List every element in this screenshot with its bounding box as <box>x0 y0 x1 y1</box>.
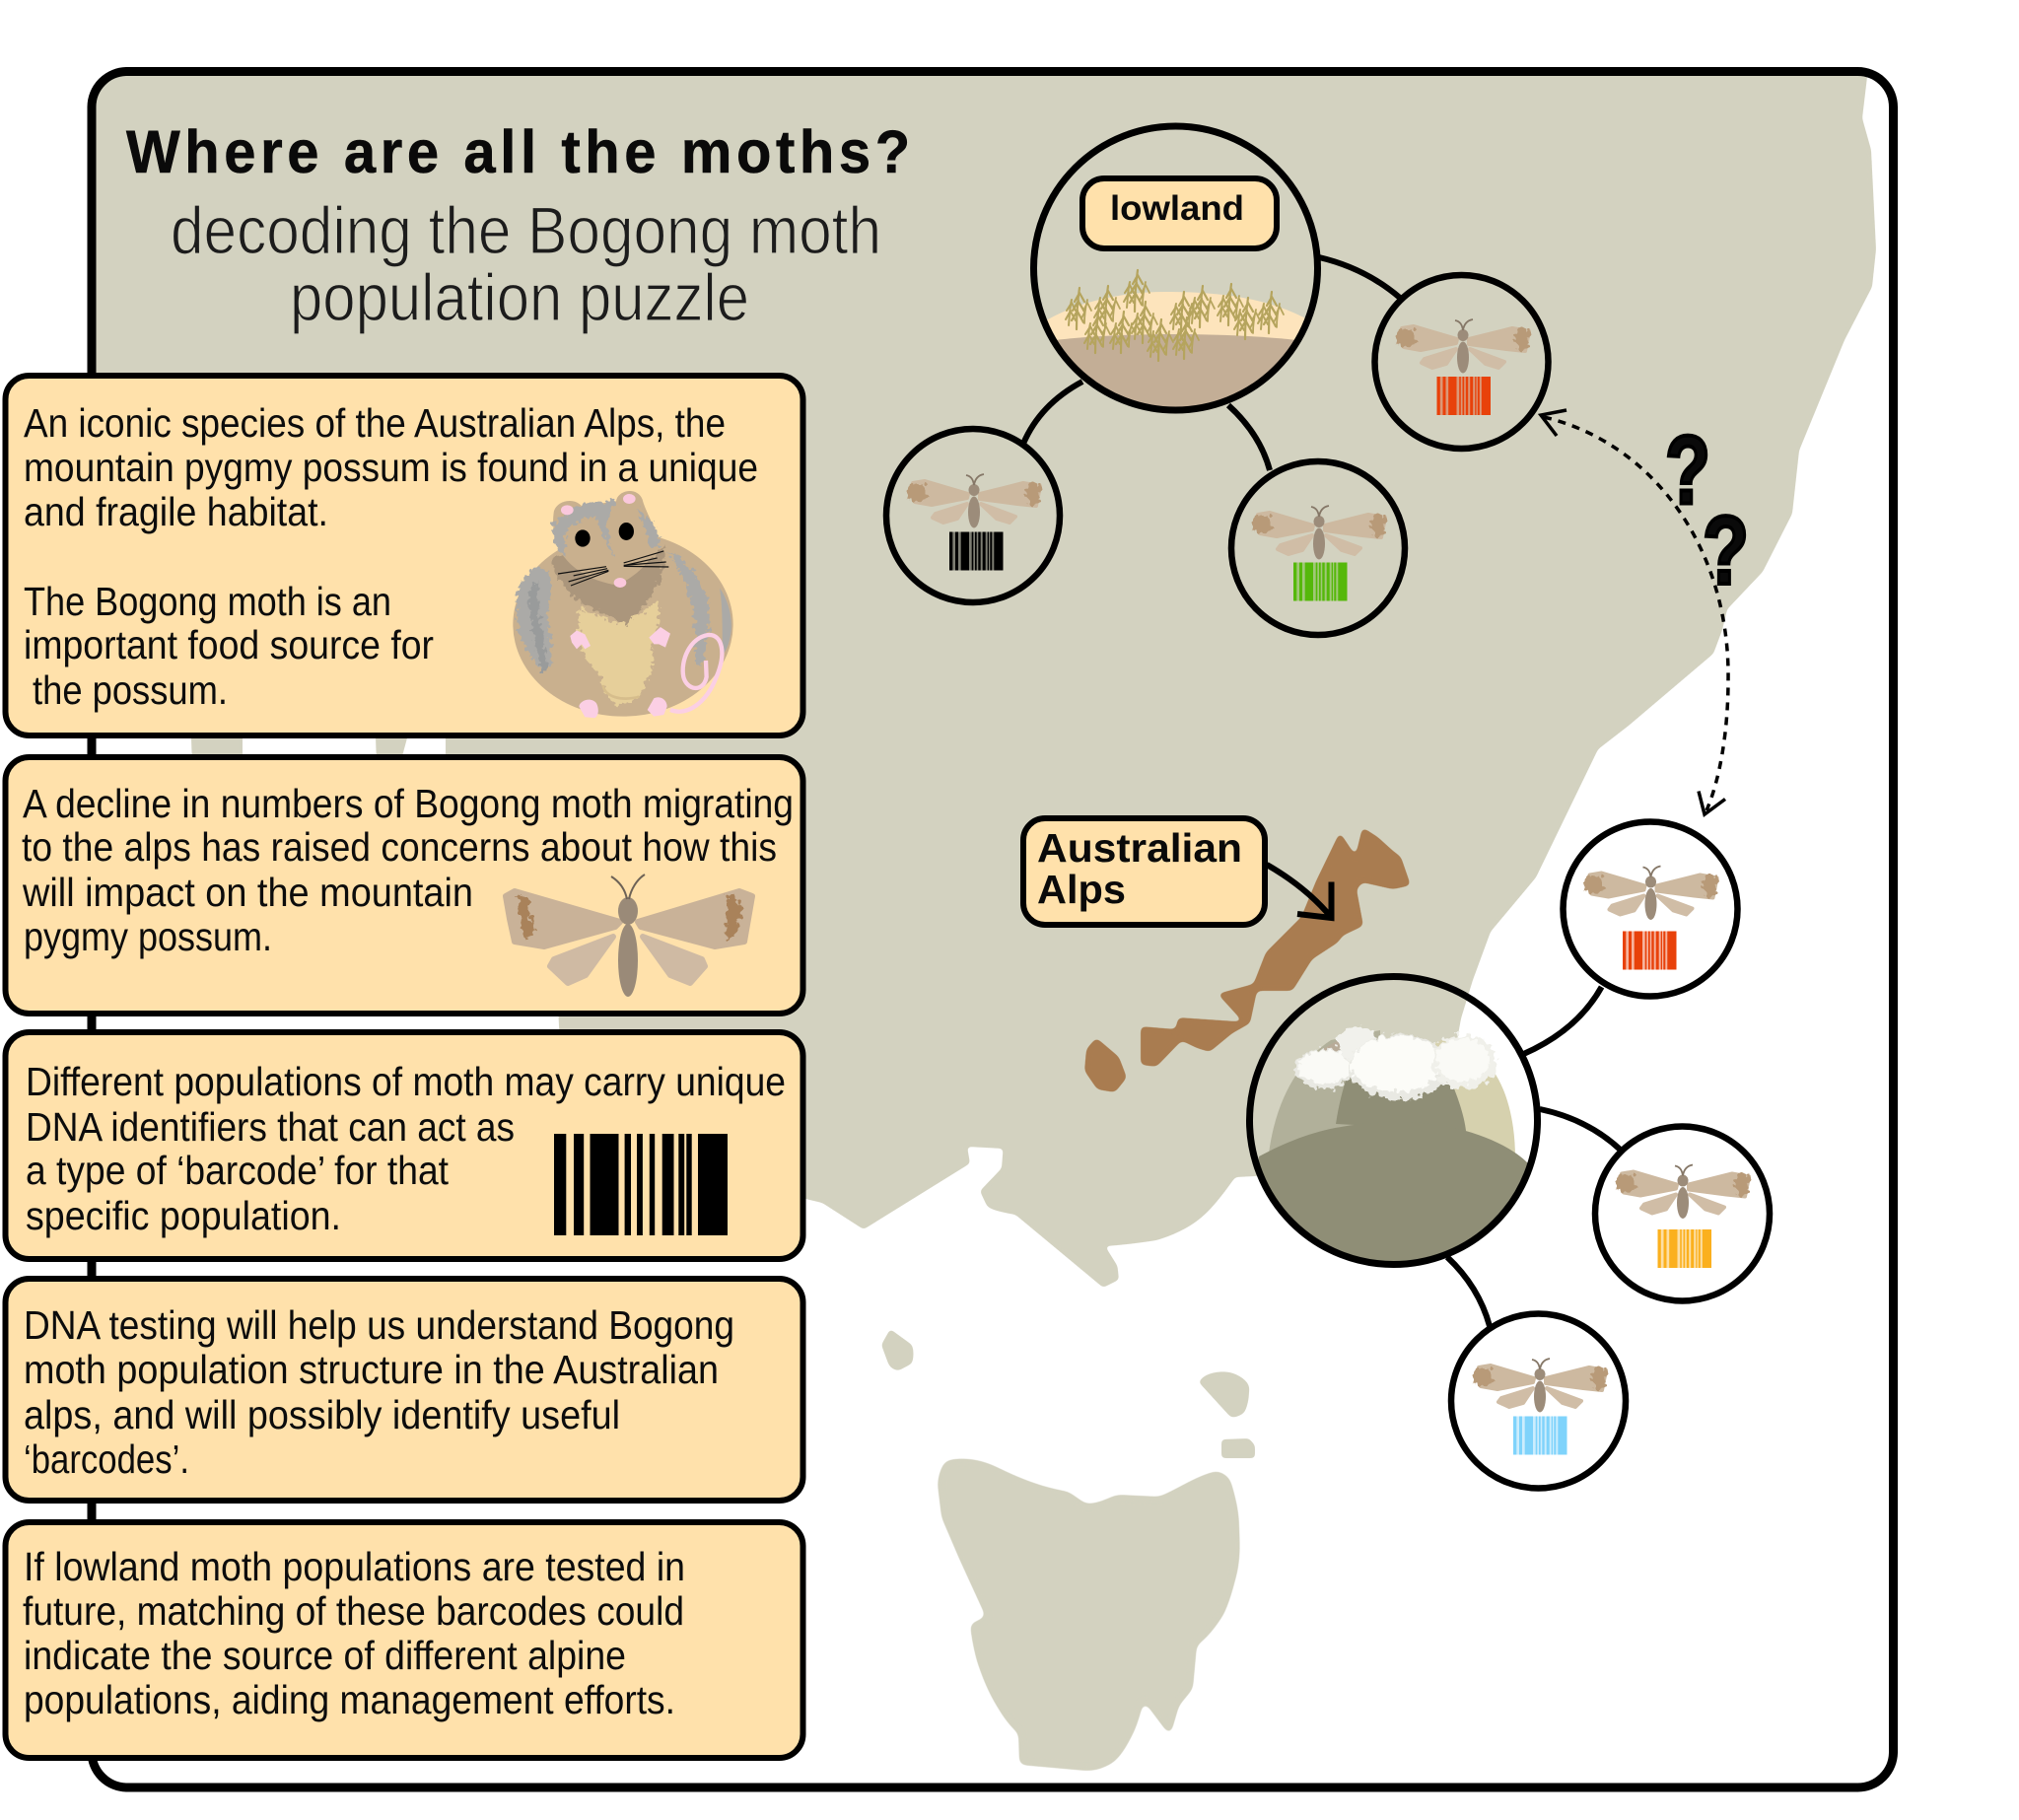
testing text: moth population structure in the Australian <box>24 1347 719 1392</box>
Tasmania <box>938 1458 1240 1771</box>
subtitle line 2: population puzzle <box>290 260 749 335</box>
decline text: pygmy possum. <box>24 914 272 959</box>
moth circle: black lowland <box>886 429 1060 602</box>
mainland <box>79 59 1876 1288</box>
possum text: and fragile habitat. <box>24 489 328 534</box>
icon: mountain pygmy possum <box>513 491 733 718</box>
question marks: ? <box>1665 416 1710 525</box>
title block <box>126 118 910 335</box>
question marks: ? <box>1703 496 1749 604</box>
panel: lowland testing <box>6 1522 802 1758</box>
barcode text: DNA identifiers that can act as <box>26 1104 515 1150</box>
possum text: mountain pygmy possum is found in a unique <box>24 445 758 490</box>
decline text <box>22 781 794 959</box>
scene art <box>1258 1024 1528 1261</box>
Cape Barren Island <box>1221 1438 1255 1458</box>
panel: DNA testing <box>6 1279 802 1501</box>
subtitle line 1: decoding the Bogong moth <box>171 193 881 268</box>
alps connectors <box>1447 987 1621 1326</box>
panel: moth decline <box>6 757 802 1014</box>
barcode text <box>26 1059 786 1238</box>
icon: black barcode <box>554 1134 728 1235</box>
arrow to alps <box>1267 865 1331 918</box>
King Island <box>881 1329 914 1370</box>
possum text: important food source for <box>24 622 434 667</box>
panel: possum <box>6 376 802 735</box>
lowland scene circle <box>1025 126 1326 424</box>
scene art <box>1047 268 1305 406</box>
testing text: alps, and will possibly identify useful <box>24 1392 620 1437</box>
possum text: The Bogong moth is an <box>24 579 391 624</box>
decline text: will impact on the mountain <box>22 870 473 915</box>
moth circle: green lowland <box>1231 461 1405 635</box>
lowland testing text: indicate the source of different alpine <box>24 1633 626 1678</box>
barcode text: a type of ‘barcode’ for that <box>26 1148 450 1193</box>
label: Australian Alps: Alps <box>1037 867 1126 912</box>
moth circle: blue alpine <box>1451 1313 1626 1489</box>
icon: large moth <box>506 875 752 997</box>
label: lowland <box>1082 178 1277 248</box>
testing text <box>24 1302 734 1482</box>
barcode text: specific population. <box>26 1193 341 1238</box>
lowland testing text: populations, aiding management efforts. <box>24 1677 675 1722</box>
lowland connectors <box>1023 257 1400 470</box>
label: Australian Alps: Australian <box>1037 825 1242 871</box>
label: Australian Alps <box>1023 818 1265 925</box>
question marks <box>1665 416 1749 604</box>
alpine scene circle <box>1247 976 1538 1282</box>
Flinders Island <box>1199 1371 1249 1418</box>
testing text: ‘barcodes’. <box>24 1436 189 1482</box>
lowland testing text <box>23 1544 685 1722</box>
decline text: to the alps has raised concerns about how this <box>22 824 777 870</box>
decline text: A decline in numbers of Bogong moth migrating <box>23 781 794 826</box>
label: lowland: lowland <box>1110 189 1244 228</box>
moth circle: yellow alpine <box>1595 1126 1770 1301</box>
Australian Alps region on map <box>1084 827 1411 1092</box>
moth circle: red lowland <box>1374 275 1548 449</box>
possum text: the possum. <box>33 667 228 713</box>
heading: Where are all the moths? <box>126 118 910 185</box>
testing text: DNA testing will help us understand Bogong <box>24 1302 734 1348</box>
panel: DNA barcodes <box>6 1032 802 1259</box>
dashed double arrow <box>1541 410 1728 814</box>
lowland testing text: If lowland moth populations are tested in <box>24 1544 685 1589</box>
barcode text: Different populations of moth may carry unique <box>26 1059 786 1104</box>
lowland testing text: future, matching of these barcodes could <box>23 1588 684 1634</box>
possum text <box>24 400 758 713</box>
possum text: An iconic species of the Australian Alps, the <box>24 400 726 446</box>
moth circle: red alpine <box>1564 822 1737 996</box>
